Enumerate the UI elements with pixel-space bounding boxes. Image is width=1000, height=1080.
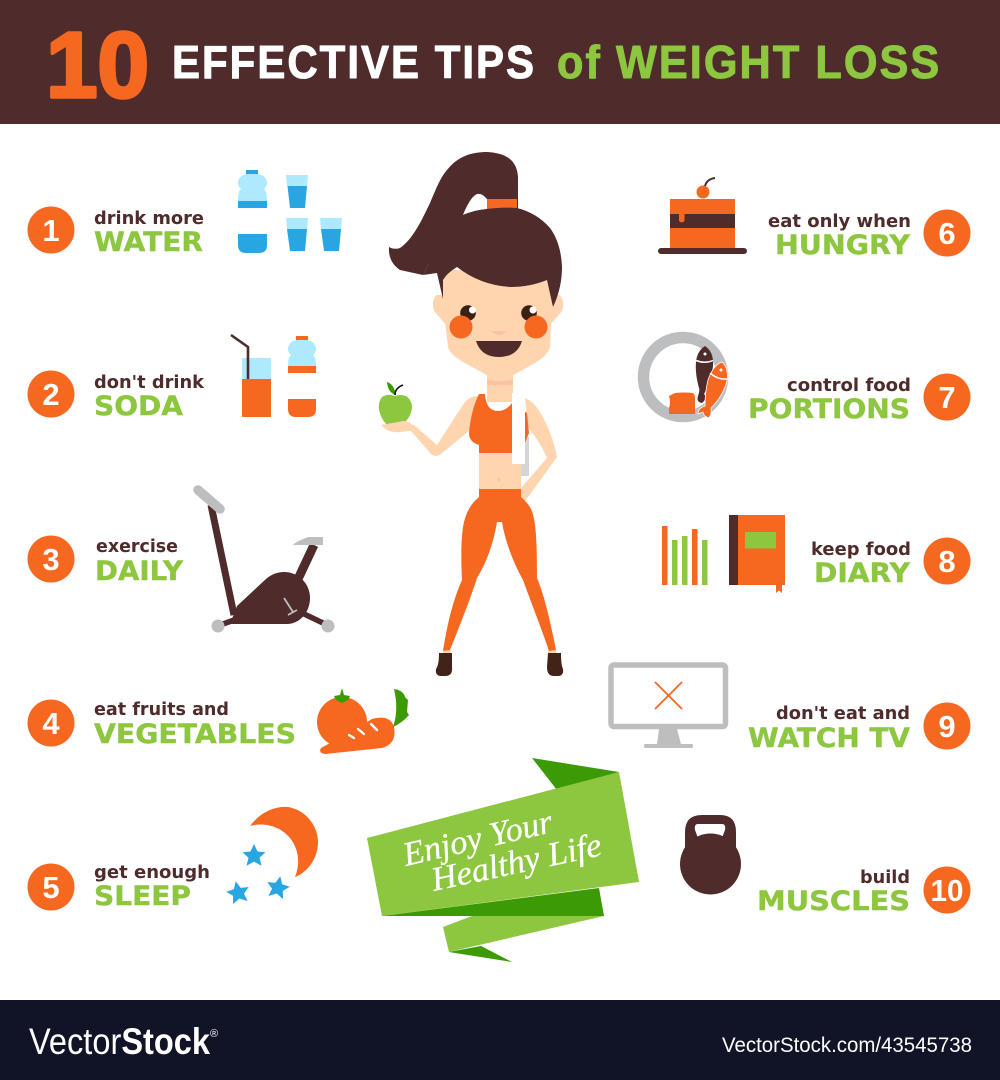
- tip 3: exercise daily: [28, 536, 183, 587]
- footer logo: VectorStock: [29, 1021, 210, 1062]
- neck: [487, 372, 513, 402]
- neck shadow: [487, 380, 513, 385]
- nose: [491, 331, 507, 336]
- title green text: of WEIGHT LOSS: [557, 38, 941, 88]
- icon: plate with fish and cheese: [644, 338, 727, 418]
- footer band: [0, 1000, 1000, 1080]
- tip 9: don't eat and watch TV: [748, 702, 970, 754]
- icon: kettlebell: [680, 815, 741, 894]
- tip 6: eat only when hungry: [768, 210, 970, 261]
- orange top: [469, 394, 529, 453]
- grey towel end: [521, 437, 529, 476]
- icon: diary book: [729, 515, 785, 593]
- mouth: [476, 341, 522, 357]
- icon: cake: [658, 178, 747, 254]
- tip 8: keep food diary: DIARY: [814, 558, 910, 589]
- tip 6: eat only when hungry: 6: [938, 216, 956, 251]
- ribbon banner: Enjoy Your Healthy Life: [367, 758, 639, 962]
- tip 6: eat only when hungry: eat only when: [768, 211, 911, 232]
- icon: soda glass and bottle: [231, 335, 316, 417]
- tip 9: don't eat and watch TV: don't eat and: [776, 703, 910, 724]
- title white text: EFFECTIVE TIPS: [172, 37, 536, 88]
- leggings: [443, 489, 556, 651]
- footer registered mark: ®: [210, 1028, 218, 1040]
- tip 3: exercise daily: exercise: [96, 536, 178, 557]
- tip 6: eat only when hungry: HUNGRY: [775, 230, 910, 261]
- tip 1: drink more water: [28, 206, 204, 258]
- tip 5: get enough sleep: SLEEP: [94, 881, 191, 912]
- ponytail: [389, 152, 518, 275]
- icon: tomato and carrot: [317, 688, 409, 754]
- icon: monitor with cross: [611, 665, 726, 748]
- tip 4: eat fruits and vegetables: eat fruits and: [94, 699, 229, 720]
- tip 10: build muscles: 10: [930, 873, 964, 908]
- tip 5: get enough sleep: [28, 862, 210, 912]
- right shoe: [547, 653, 563, 676]
- banner text line 2: Healthy Life: [427, 827, 605, 899]
- tip 2: don't drink soda: 2: [42, 377, 60, 412]
- white towel: [512, 393, 525, 464]
- tip 1: drink more water: WATER: [94, 227, 203, 258]
- face: [443, 270, 553, 379]
- tip 7: control food portions: 7: [938, 380, 956, 415]
- icon: water bottle and glasses: [238, 170, 342, 253]
- tip 2: don't drink soda: don't drink: [94, 372, 205, 393]
- eyes: [460, 305, 476, 321]
- tip 8: keep food diary: 8: [938, 544, 956, 579]
- apple: [379, 395, 412, 425]
- tip 2: don't drink soda: SODA: [94, 391, 183, 422]
- ears: [433, 295, 563, 325]
- hair: [413, 208, 562, 307]
- tip 3: exercise daily: DAILY: [95, 556, 183, 587]
- icon: bar chart: [662, 526, 708, 585]
- tip 5: get enough sleep: 5: [42, 870, 60, 905]
- title number: 10: [46, 13, 149, 117]
- tip 8: keep food diary: [811, 538, 970, 589]
- tip 4: eat fruits and vegetables: [28, 699, 296, 750]
- tip 9: don't eat and watch TV: WATCH TV: [748, 723, 910, 754]
- tip 1: drink more water: drink more: [94, 208, 204, 229]
- tip 3: exercise daily: 3: [42, 542, 60, 577]
- left shoe: [436, 653, 452, 676]
- banner text line 1: Enjoy Your: [398, 803, 557, 874]
- ponytail gap: [463, 194, 487, 215]
- tip 10: build muscles: build: [860, 867, 910, 888]
- tip 4: eat fruits and vegetables: 4: [42, 706, 60, 741]
- apple stem: [395, 385, 403, 395]
- footer image id: VectorStock.com/43545738: [722, 1034, 972, 1057]
- header band with title: [0, 0, 1000, 124]
- tip 5: get enough sleep: get enough: [94, 862, 210, 883]
- tip 7: control food portions: PORTIONS: [748, 394, 910, 425]
- right arm: [521, 398, 557, 501]
- ankles: [443, 650, 556, 654]
- tip 7: control food portions: control food: [787, 375, 911, 396]
- midriff: [479, 450, 521, 491]
- tip 1: drink more water: 1: [42, 213, 60, 248]
- tip 4: eat fruits and vegetables: VEGETABLES: [94, 719, 296, 750]
- tip 9: don't eat and watch TV: 9: [938, 709, 956, 744]
- icon: moon and stars: [224, 807, 318, 905]
- tip 2: don't drink soda: [28, 370, 205, 422]
- apple leaf: [387, 382, 396, 395]
- hair band: [487, 199, 517, 209]
- icon: exercise bike: [198, 490, 334, 632]
- hand fingers: [381, 421, 412, 432]
- tip 10: build muscles: [757, 866, 970, 917]
- tip 7: control food portions: [748, 374, 970, 425]
- cheeks: [450, 316, 472, 338]
- left arm: [382, 396, 482, 456]
- tip 8: keep food diary: keep food: [811, 539, 911, 560]
- tip 10: build muscles: MUSCLES: [757, 886, 910, 917]
- central character: girl holding an apple: [379, 152, 563, 676]
